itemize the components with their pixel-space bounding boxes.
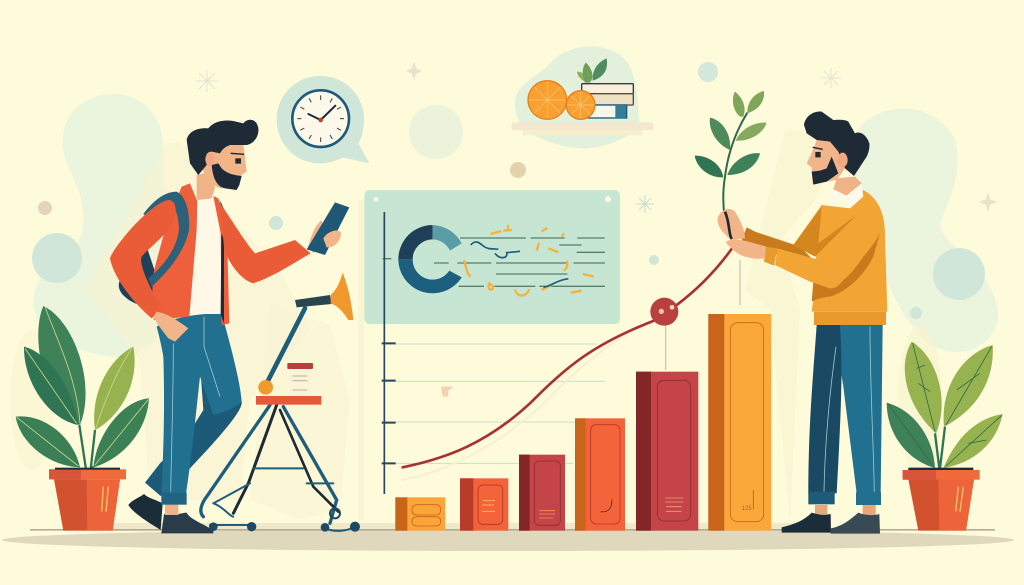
neck: [197, 172, 215, 200]
bar 2: [460, 478, 508, 531]
chart panel with donut chart: [364, 190, 620, 324]
leaves: [577, 58, 607, 83]
bar 3: [519, 455, 565, 531]
bar 4: [575, 418, 625, 531]
head: [804, 112, 869, 185]
leaves: [887, 342, 1003, 468]
donut chart: [398, 225, 462, 293]
ear: [205, 153, 215, 166]
cuff: [764, 247, 777, 266]
ankle: [165, 503, 178, 515]
shelf board: [512, 122, 653, 135]
bar 5: [636, 372, 698, 531]
lower hand: [726, 240, 766, 259]
collar: [830, 183, 863, 208]
stems: [935, 427, 945, 468]
clock face: [292, 90, 349, 147]
growth curve: [402, 247, 740, 480]
hem: [814, 312, 886, 325]
head: [187, 120, 258, 190]
back arm and cuff: [742, 227, 813, 260]
left potted plant: [16, 306, 149, 531]
bar 1: [395, 497, 445, 531]
ear: [838, 153, 848, 167]
background blob: right: [853, 109, 998, 352]
walker frame with horn: [201, 273, 360, 532]
handle and horn: [295, 273, 353, 320]
leaves: [16, 306, 149, 467]
pant cuffs: [161, 493, 187, 505]
shelf with oranges and books: [512, 46, 653, 148]
beard: [812, 157, 838, 185]
pot: [903, 468, 980, 531]
jar: [287, 363, 313, 395]
rear arm: [110, 200, 176, 318]
books: [582, 84, 633, 118]
curve marker: [650, 298, 678, 326]
eye and brow: [231, 153, 244, 163]
right strap: [220, 200, 227, 230]
beard: [212, 163, 242, 190]
background blob: left: [34, 94, 197, 357]
under-sleeve shadow: [812, 227, 882, 302]
hand on hip: [153, 312, 188, 342]
shoes: [782, 513, 880, 534]
right potted plant: [887, 342, 1003, 531]
panel pins: [374, 196, 611, 202]
decorative sparkles: [196, 63, 996, 213]
phone and hand: [307, 202, 349, 255]
large orange: [528, 81, 567, 119]
bar chart: [395, 314, 771, 531]
pant seams: [171, 317, 220, 492]
line chart axis and gridlines: [382, 212, 605, 494]
faint marker: [441, 387, 453, 397]
support lines: [666, 260, 740, 370]
jacket body: [152, 183, 229, 325]
shadow shapes behind figures: [10, 130, 942, 520]
small orange: [566, 91, 595, 119]
bar 6: [708, 314, 771, 531]
clock in speech bubble: [277, 76, 369, 163]
t-shirt: [189, 198, 222, 314]
neck: [833, 177, 862, 197]
upper hand: [717, 209, 745, 240]
blob behind shelf: [515, 46, 640, 148]
backpack strap: [143, 192, 189, 287]
rear leg: [145, 362, 242, 496]
branch: [695, 91, 767, 237]
hair: [804, 112, 869, 176]
panel scribbles: [464, 225, 594, 295]
wheels: [209, 508, 360, 532]
frame poles: [201, 308, 353, 531]
panel text lines: [383, 238, 605, 286]
eye and brow: [813, 147, 823, 157]
chest shadow: [793, 207, 857, 257]
stems: [79, 425, 95, 469]
pale curve shadow: [402, 328, 637, 480]
seat: [256, 396, 321, 405]
hair: [187, 120, 258, 175]
speech bubble: [277, 76, 369, 163]
backpack: [119, 247, 160, 304]
curve line: [403, 247, 733, 467]
pot: [49, 468, 126, 531]
ankles: [815, 505, 876, 515]
panel squiggles: [471, 242, 568, 287]
bar 6: 125: [742, 506, 752, 512]
ground: [2, 523, 1014, 551]
orange ball: [258, 380, 273, 395]
sweater: [764, 190, 887, 325]
right person holding plant: [695, 91, 887, 534]
sleeve: [775, 204, 883, 288]
raised arm: [220, 203, 311, 283]
decorative circles: [32, 62, 985, 319]
shoes: [128, 494, 213, 533]
front leg: [157, 313, 242, 494]
jeans: [808, 325, 883, 505]
left person looking at phone: [110, 120, 349, 533]
